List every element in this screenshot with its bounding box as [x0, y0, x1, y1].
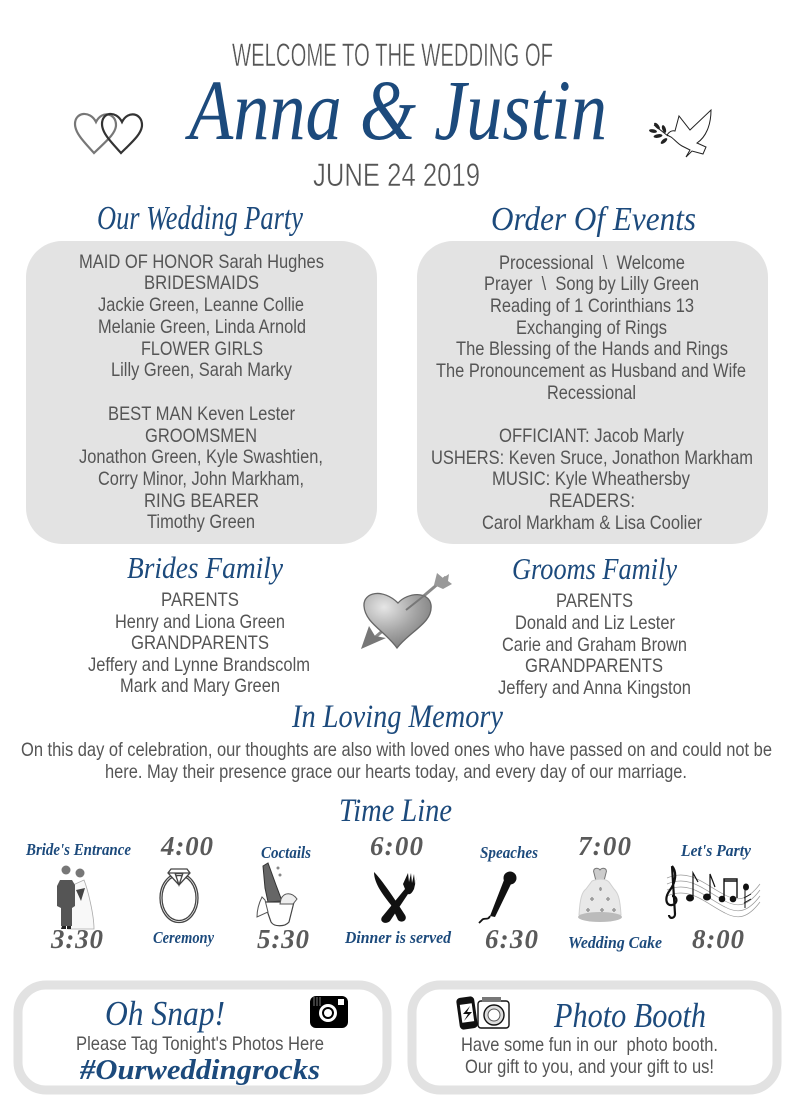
timeline labels and times: Bride's Entrance [25, 840, 131, 859]
panel: oh snap hashtag [18, 985, 387, 1090]
events list: Exchanging of Rings [516, 317, 667, 339]
timeline labels and times: 5:30 [257, 924, 310, 954]
party names list: GROOMSMEN [145, 425, 257, 447]
brides family names: GRANDPARENTS [131, 632, 269, 654]
grooms family names: Jeffery and Anna Kingston [498, 677, 691, 699]
party names list: BEST MAN Keven Lester [108, 403, 295, 425]
timeline labels and times: 7:00 [578, 831, 632, 861]
icon: wedding cake [578, 868, 622, 922]
couple names: Anna & Justin [185, 62, 607, 158]
hashtag: #Ourweddingrocks [79, 1054, 320, 1086]
timeline labels and times: 6:00 [370, 831, 424, 861]
events list: The Pronouncement as Husband and Wife [436, 360, 746, 382]
grooms family names: PARENTS [556, 590, 633, 612]
icon: microphone [479, 872, 516, 923]
events list: Carol Markham & Lisa Coolier [482, 512, 702, 534]
events list: The Blessing of the Hands and Rings [456, 338, 728, 360]
heading: photo booth: Photo Booth [553, 996, 706, 1035]
events list: MUSIC: Kyle Wheathersby [492, 468, 690, 490]
icon: interlocked hearts [75, 114, 142, 153]
icon: heart pierced by arrow [361, 573, 452, 649]
heading: in loving memory: In Loving Memory [291, 699, 503, 735]
card outline [18, 985, 387, 1090]
panel: our wedding party [26, 200, 377, 544]
icon: music notes on staff [666, 866, 760, 918]
brides family names: Henry and Liona Green [115, 611, 285, 633]
timeline labels and times: 6:30 [485, 924, 538, 954]
heading: grooms family: Grooms Family [512, 551, 677, 586]
party names list: FLOWER GIRLS [141, 338, 263, 360]
party names list: Melanie Green, Linda Arnold [98, 316, 306, 338]
welcome line: WELCOME TO THE WEDDING OF [232, 37, 553, 73]
grey card [417, 241, 768, 544]
grooms family names: Carie and Graham Brown [502, 634, 687, 656]
memorial paragraph: here. May their presence grace our hearts today, and every day of our marriage. [105, 761, 687, 783]
party names list: Lilly Green, Sarah Marky [111, 359, 292, 381]
party names list: Timothy Green [147, 511, 255, 533]
timeline labels and times: Wedding Cake [568, 933, 662, 952]
timeline labels and times: 8:00 [692, 924, 744, 954]
card outline [412, 985, 777, 1090]
events list [431, 252, 753, 534]
grey card [26, 241, 377, 544]
brides family names [88, 589, 310, 697]
memorial paragraph [21, 739, 772, 783]
photo booth text [461, 1034, 718, 1078]
events list: Reading of 1 Corinthians 13 [490, 295, 694, 317]
timeline labels and times [25, 831, 751, 954]
icon: crossed knife and fork [374, 872, 417, 923]
heading: brides family: Brides Family [127, 550, 283, 585]
timeline labels and times: Coctails [261, 843, 311, 862]
icon: dove with olive branch [649, 110, 711, 157]
panel: photo booth [412, 985, 777, 1090]
party names list: Jackie Green, Leanne Collie [98, 294, 304, 316]
timeline labels and times: 4:00 [160, 831, 214, 861]
icon: bride and groom [57, 866, 94, 929]
instruction text: Please Tag Tonight's Photos Here [76, 1033, 324, 1055]
brides family names: Mark and Mary Green [120, 675, 280, 697]
icon: phone and camera [456, 996, 509, 1030]
timeline labels and times: Dinner is served [344, 928, 451, 947]
timeline labels and times: Ceremony [153, 928, 214, 947]
brides family names: Jeffery and Lynne Brandscolm [88, 654, 310, 676]
icon: champagne in bucket [257, 863, 297, 926]
party names list: RING BEARER [144, 490, 259, 512]
party names list: MAID OF HONOR Sarah Hughes [79, 251, 324, 273]
icon: instagram camera [310, 996, 348, 1028]
heading: our wedding party: Our Wedding Party [97, 200, 304, 237]
events list: Processional \ Welcome [499, 252, 685, 274]
party names list: BRIDESMAIDS [144, 272, 259, 294]
grooms family names [498, 590, 691, 699]
block: brides family [88, 550, 310, 697]
grooms family names: Donald and Liz Lester [515, 612, 675, 634]
timeline labels and times: Speaches [480, 843, 538, 862]
header title block [185, 37, 607, 193]
events list: Recessional [547, 382, 636, 404]
timeline labels and times: Let's Party [680, 841, 751, 860]
timeline labels and times: 3:30 [50, 924, 104, 954]
events list: OFFICIANT: Jacob Marly [499, 425, 684, 447]
wedding date: JUNE 24 2019 [313, 157, 480, 193]
party names list [79, 251, 324, 533]
grooms family names: GRANDPARENTS [525, 655, 663, 677]
photo booth text: Have some fun in our photo booth. [461, 1034, 718, 1056]
brides family names: PARENTS [161, 589, 239, 611]
block: grooms family [498, 551, 691, 699]
heading: time line: Time Line [339, 793, 452, 829]
heading: order of events: Order Of Events [491, 201, 696, 238]
block: in loving memory [21, 699, 772, 783]
heading: oh snap: Oh Snap! [105, 994, 225, 1033]
party names list: Jonathon Green, Kyle Swashtien, [79, 446, 323, 468]
party names list: Corry Minor, John Markham, [98, 468, 304, 490]
timeline section [25, 793, 760, 954]
panel: order of events [417, 201, 768, 544]
photo booth text: Our gift to you, and your gift to us! [465, 1056, 714, 1078]
icon: diamond ring [160, 869, 198, 922]
events list: Prayer \ Song by Lilly Green [484, 273, 699, 295]
events list: READERS: [549, 490, 635, 512]
